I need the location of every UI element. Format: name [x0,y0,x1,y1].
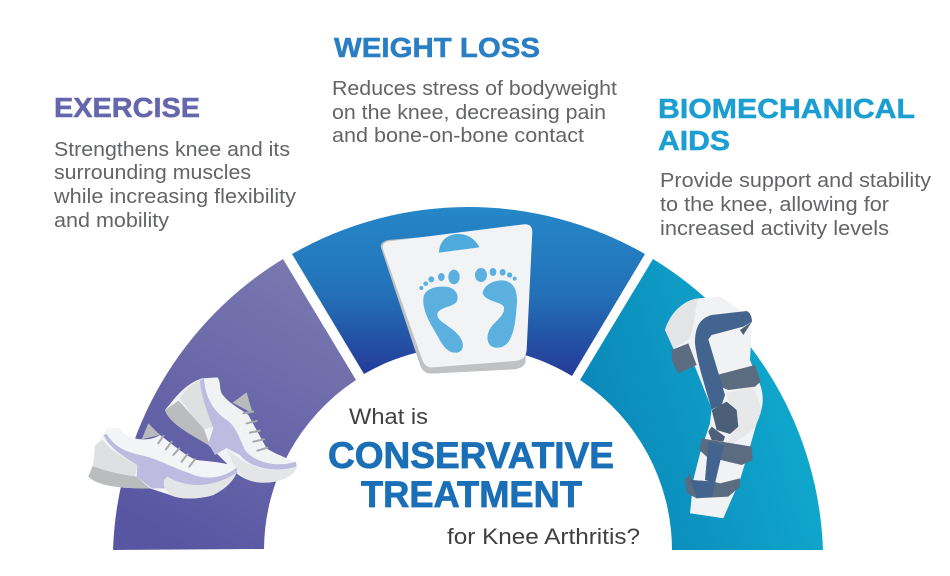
text block: exercise description: surrounding muscles [54,162,251,184]
text block: biomechanical aids description: increased activity levels [660,218,889,240]
text block: biomechanical aids description: Provide support and stability [660,170,931,192]
text block: exercise description: and mobility [54,210,169,232]
scale display dial [439,234,479,253]
text block: biomechanical aids description [660,170,931,240]
title: what is conservative treatment for knee arthritis [328,404,640,549]
title: what is conservative treatment for knee arthritis: CONSERVATIVE [328,435,614,476]
panel: weight loss arc segment [292,207,645,376]
text block: weight loss description: Reduces stress of bodyweight [332,78,617,100]
left footprint [419,270,463,353]
text block: exercise description [53,139,296,232]
text block: biomechanical aids description: to the knee, allowing for [660,194,889,216]
icon: running shoes [88,377,297,498]
text block: weight loss description: and bone-on-bone contact [332,125,584,147]
title: what is conservative treatment for knee arthritis: TREATMENT [361,474,582,515]
title: what is conservative treatment for knee arthritis: for Knee Arthritis? [447,524,640,549]
heading: weight loss: WEIGHT LOSS [334,32,540,63]
panel: exercise arc segment [113,259,356,550]
icon: bathroom scale [381,224,532,374]
heading: biomechanical aids: AIDS [658,125,730,156]
text block: exercise description: while increasing flexibility [53,186,296,208]
heading: biomechanical aids: BIOMECHANICAL [658,93,915,124]
icon: knee brace [665,297,763,518]
panel: biomechanical aids arc segment [580,259,823,550]
heading: exercise: EXERCISE [54,92,200,123]
text block: exercise description: Strengthens knee and its [54,139,290,161]
text block: weight loss description [332,78,617,147]
right footprint [475,268,517,348]
title: what is conservative treatment for knee arthritis: What is [349,404,428,429]
heading: biomechanical aids [658,93,915,156]
text block: weight loss description: on the knee, decreasing pain [332,102,606,124]
